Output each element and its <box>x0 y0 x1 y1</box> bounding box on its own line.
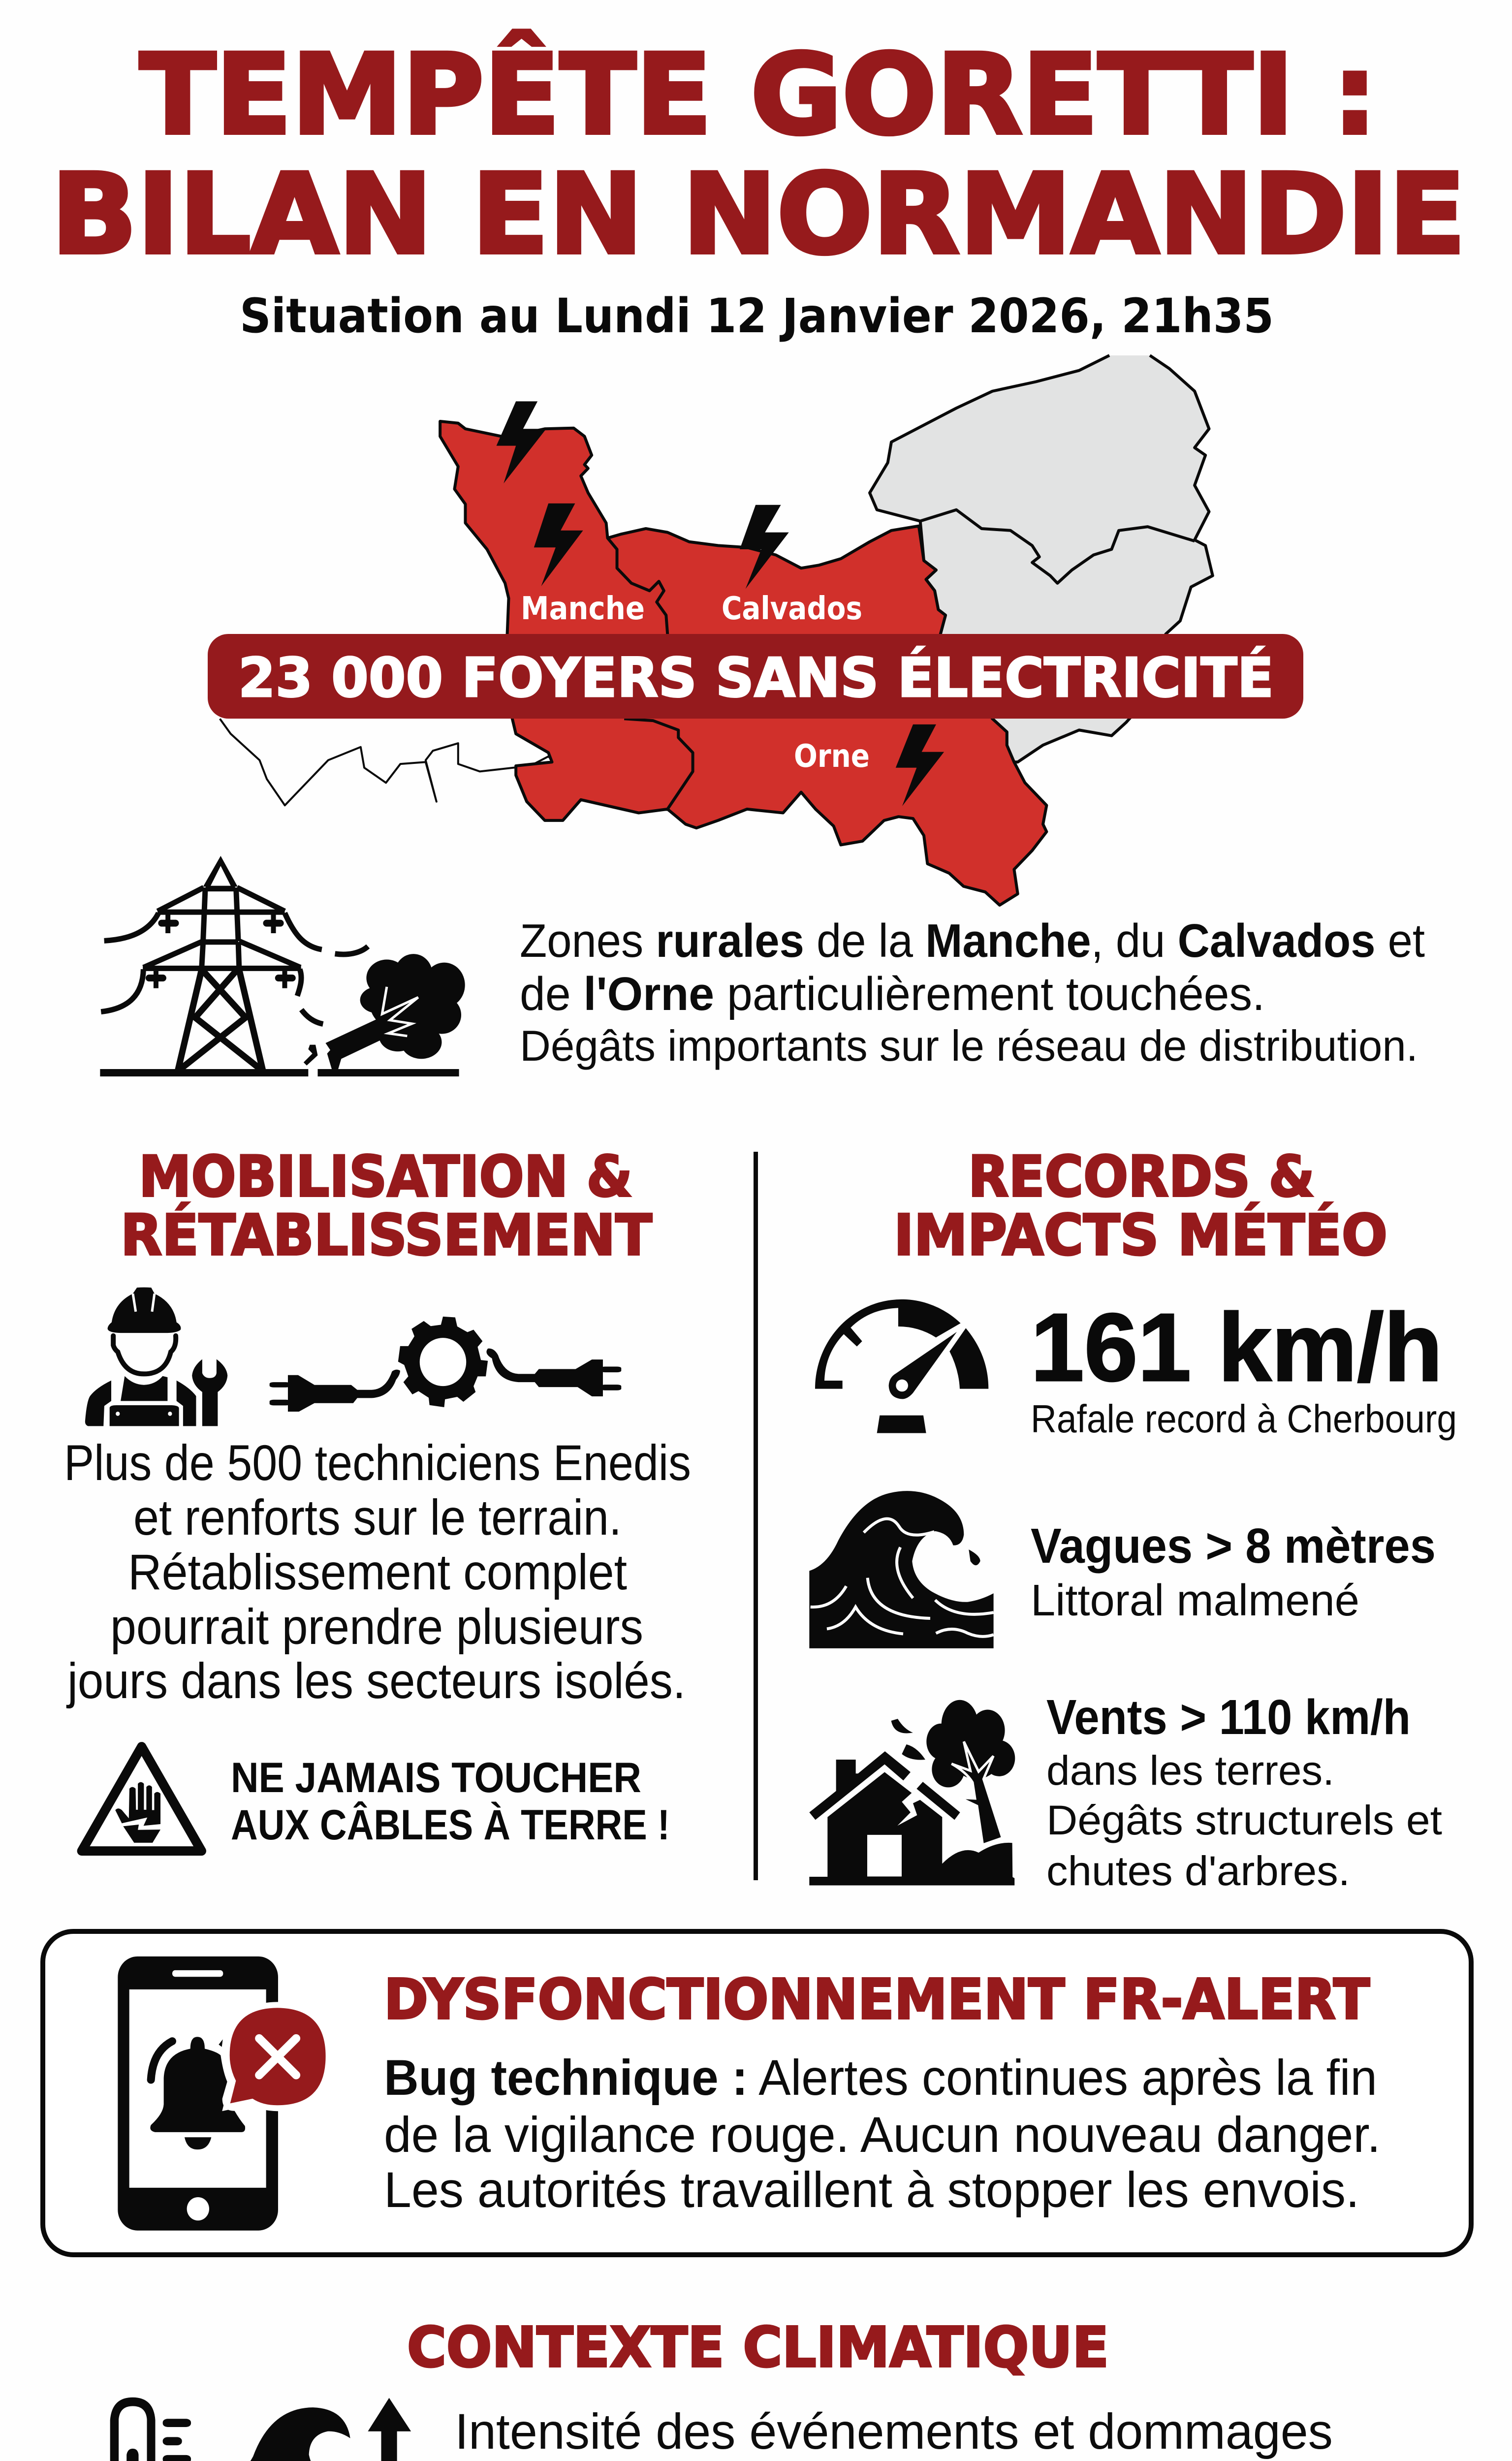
text: technicians mobilised: Plus de 500 techniciens Enedis <box>64 1435 691 1491</box>
text: climate context: Intensité des événements et dommages <box>455 2403 1333 2460</box>
text: technical bug: Bug technique : Alertes continues après la fin <box>384 2050 1377 2106</box>
broken wires <box>101 913 368 1024</box>
heading: records: RECORDS & <box>968 1144 1315 1209</box>
icon: pylon and fallen tree <box>100 856 465 1076</box>
heading: contexte climatique: CONTEXTE CLIMATIQUE <box>407 2316 1109 2380</box>
icon: technician with wrench <box>85 1287 227 1426</box>
warning: do not touch cables <box>231 1754 670 1849</box>
tree <box>304 954 465 1070</box>
icon: lightning bolts <box>497 401 944 806</box>
text: technical bug: de la vigilance rouge. Aucun nouveau danger. <box>384 2107 1381 2163</box>
warning: do not touch cables: AUX CÂBLES À TERRE ! <box>231 1801 670 1849</box>
panel: FR-Alert malfunction <box>43 1931 1471 2255</box>
text: technicians mobilised: jours dans les secteurs isolés. <box>66 1653 686 1709</box>
heading: dysfonctionnement FR-Alert: DYSFONCTIONNEMENT FR-ALERT <box>384 1968 1370 2032</box>
text: technicians mobilised: pourrait prendre plusieurs <box>110 1599 643 1655</box>
map labels: departments: Orne <box>794 738 870 775</box>
heading: records: IMPACTS MÉTÉO <box>894 1202 1387 1268</box>
stat: waves over 8 metres: Vagues > 8 mètres <box>1031 1518 1436 1574</box>
map: affected departments in red <box>440 421 1046 905</box>
map labels: departments: Calvados <box>722 591 862 627</box>
map labels: departments: Manche <box>521 591 645 627</box>
stat: waves over 8 metres: Littoral malmené <box>1031 1576 1359 1625</box>
map of Normandy <box>220 355 1213 905</box>
heading: mobilisation <box>121 1144 652 1268</box>
icon: thermometer <box>95 2398 191 2461</box>
stat: inland winds: dans les terres. <box>1046 1747 1334 1794</box>
icon: damaged house and tree <box>809 1700 1015 1886</box>
stat: waves over 8 metres <box>1031 1518 1436 1625</box>
stat: 161 km/h: Rafale record à Cherbourg <box>1031 1397 1457 1441</box>
heading: mobilisation: RÉTABLISSEMENT <box>121 1202 652 1268</box>
stat: 161 km/h: 161 km/h <box>1031 1294 1443 1401</box>
text: technical bug: Les autorités travaillent à stopper les envois. <box>384 2162 1359 2218</box>
text: affected rural areas <box>520 915 1425 1070</box>
icon: warning triangle with hand <box>82 1747 201 1851</box>
stat: inland winds <box>1046 1690 1442 1894</box>
stat: inland winds: chutes d'arbres. <box>1046 1848 1350 1894</box>
icon: breaking wave <box>809 1491 994 1648</box>
icon: rising sea level <box>224 2398 411 2461</box>
icon: plugs and gear <box>270 1317 621 1412</box>
text: technical bug <box>384 2050 1381 2218</box>
map: unaffected departments in grey <box>870 355 1213 762</box>
title: BILAN EN NORMANDIE <box>51 150 1466 279</box>
map: internal border of the grey departments <box>920 510 1195 583</box>
map: neighbouring coast outline <box>220 719 556 805</box>
pylon <box>143 856 301 1070</box>
heading: mobilisation: MOBILISATION & <box>139 1144 632 1209</box>
text: affected rural areas: Dégâts importants sur le réseau de distribution. <box>520 1021 1418 1070</box>
stat: inland winds: Vents > 110 km/h <box>1046 1690 1411 1745</box>
banner: 23 000 foyers sans électricité: 23 000 FOYERS SANS ÉLECTRICITÉ <box>238 646 1274 709</box>
text: affected rural areas: de l'Orne particulièrement touchées. <box>520 968 1265 1020</box>
ground <box>100 1069 459 1076</box>
map labels: departments <box>521 591 870 775</box>
text: technicians mobilised: Rétablissement complet <box>128 1544 627 1600</box>
icon: phone with bell and error bubble <box>118 1956 326 2231</box>
warning: do not touch cables: NE JAMAIS TOUCHER <box>231 1754 641 1801</box>
title <box>51 30 1466 279</box>
map: department borders <box>607 538 693 809</box>
text: technicians mobilised <box>64 1435 691 1709</box>
subtitle: date and time: Situation au Lundi 12 Janvier 2026, 21h35 <box>240 288 1274 344</box>
text: affected rural areas: Zones rurales de la Manche, du Calvados et <box>520 915 1425 967</box>
heading: records <box>894 1144 1387 1268</box>
text: technicians mobilised: et renforts sur le terrain. <box>133 1489 622 1546</box>
icon: speedometer <box>815 1299 988 1433</box>
stat: inland winds: Dégâts structurels et <box>1046 1797 1442 1843</box>
title: TEMPÊTE GORETTI : <box>140 30 1377 159</box>
